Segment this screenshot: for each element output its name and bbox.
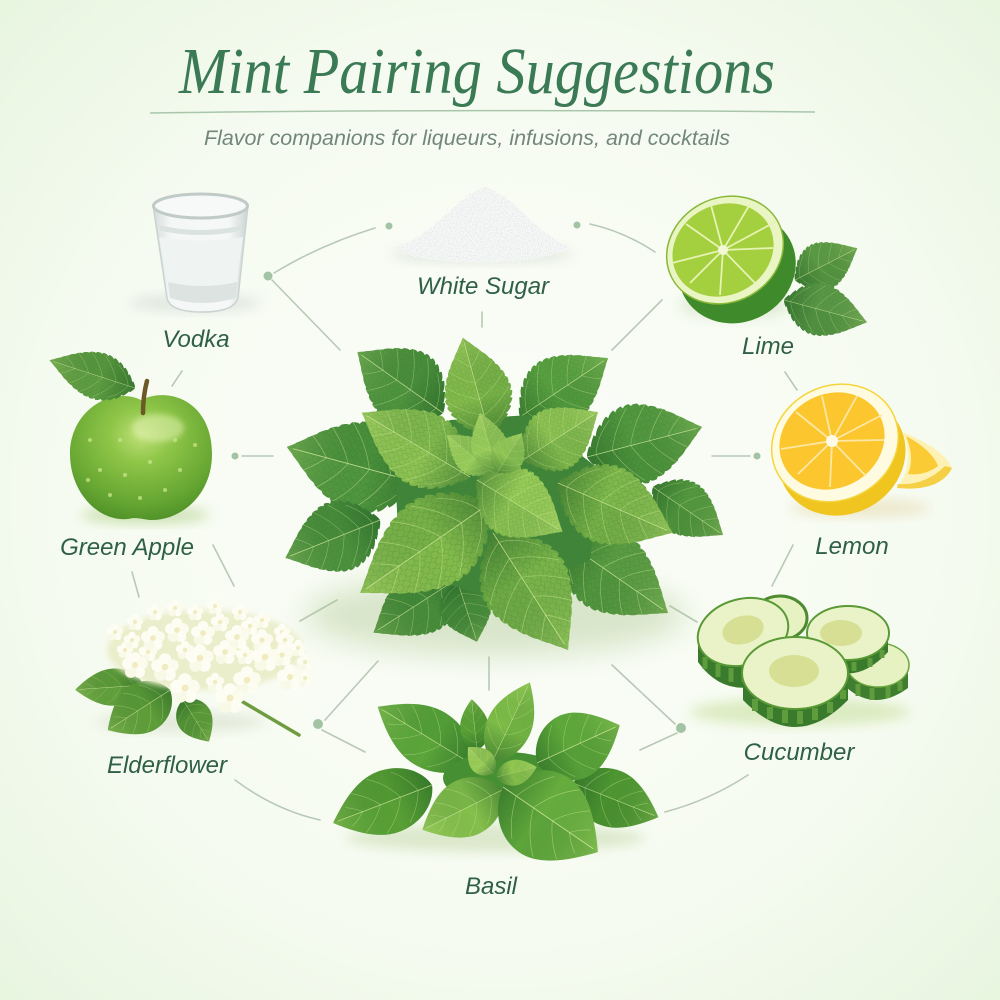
icon: lemon <box>751 362 952 538</box>
label: lemon: Lemon <box>815 533 889 560</box>
icon: elderflower cluster <box>74 598 313 751</box>
center filler <box>395 415 600 600</box>
label: green apple: Green Apple <box>60 534 194 561</box>
central mint shadow <box>305 573 685 657</box>
front slice <box>742 637 848 727</box>
label: white sugar: White Sugar <box>417 273 550 300</box>
icon: shot glass of vodka <box>129 194 261 312</box>
label: lime: Lime <box>742 333 794 360</box>
icon: basil sprig <box>322 673 669 889</box>
connector network <box>132 222 797 820</box>
label: elderflower: Elderflower <box>107 752 228 779</box>
icon: central mint sprig <box>272 320 739 674</box>
left slice <box>690 588 796 688</box>
center filler <box>443 752 567 804</box>
back right slice <box>807 606 889 674</box>
label: vodka: Vodka <box>162 326 230 353</box>
title: Mint Pairing Suggestions <box>178 35 775 108</box>
far right slice <box>847 643 909 700</box>
title rule <box>150 111 815 113</box>
icon: cucumber slices <box>690 588 910 727</box>
label: basil: Basil <box>465 873 518 900</box>
subtitle: Flavor companions for liqueurs, infusions, and cocktails <box>204 127 731 150</box>
label: cucumber: Cucumber <box>744 739 855 766</box>
back left slice <box>753 596 807 640</box>
icon: green apple <box>42 338 212 524</box>
icon: white sugar pile <box>390 187 574 263</box>
icon: lime <box>648 176 874 348</box>
